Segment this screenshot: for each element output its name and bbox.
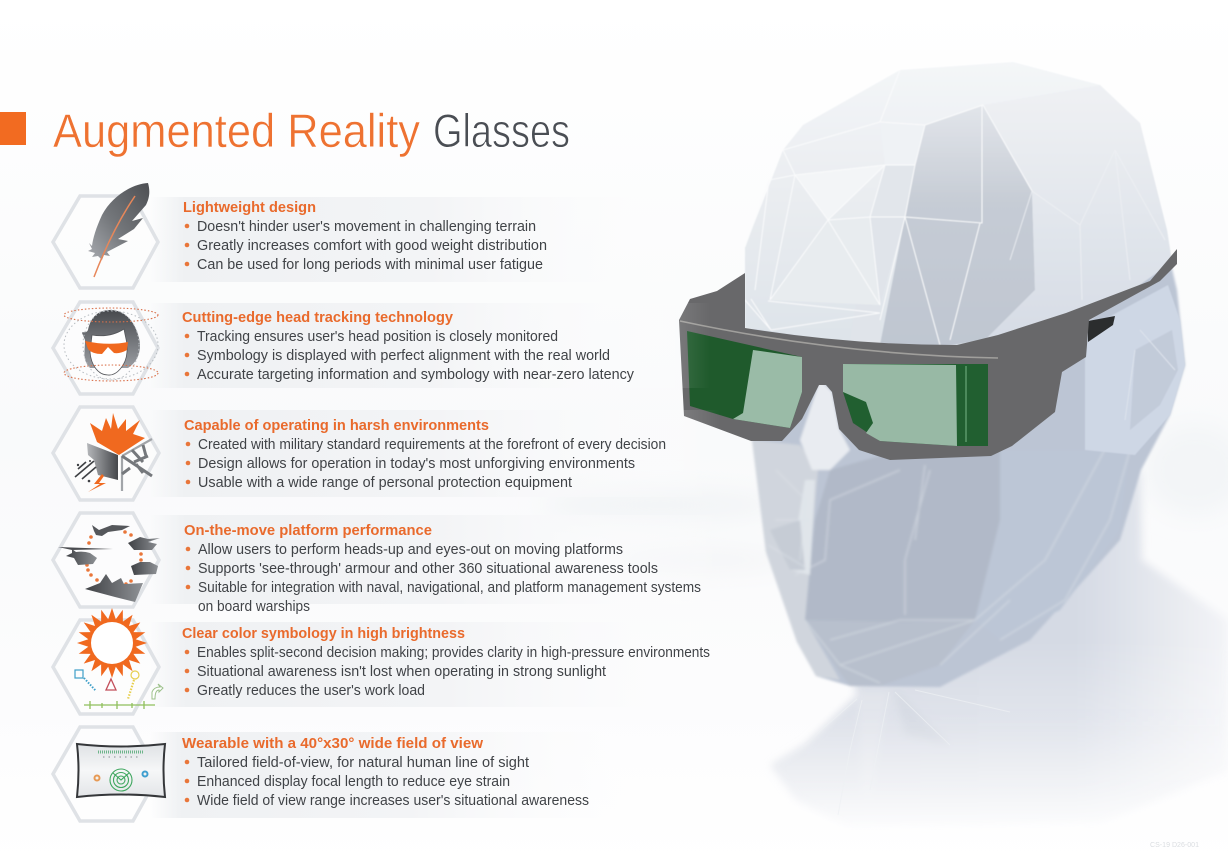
title: Augmented Reality: [53, 104, 420, 157]
heading: On-the-move platform performance: [184, 523, 432, 539]
icon: sunburst with coloured symbols: [53, 608, 163, 714]
bullet list: Greatly reduces the user's work load: [197, 683, 425, 699]
bullet list: Symbology is displayed with perfect alignment with the real world: [197, 348, 610, 364]
bullet list: Greatly increases comfort with good weight distribution: [197, 238, 547, 254]
illustration: faceted head wearing AR glasses: [679, 62, 1228, 830]
bullet list: on board warships: [198, 599, 310, 615]
heading: Clear color symbology in high brightness: [182, 626, 465, 642]
bullet list: Tailored field-of-view, for natural human line of sight: [197, 755, 529, 771]
icon: blast, cold and debris cube: [53, 407, 159, 500]
bullet list: Tracking ensures user's head position is closely monitored: [197, 329, 558, 345]
icon: vehicles around dotted circle: [53, 513, 160, 607]
title accent square: [0, 112, 26, 145]
bullet list: Enables split-second decision making; provides clarity in high-pressure environments: [197, 645, 710, 661]
bullet list: Doesn't hinder user's movement in challenging terrain: [197, 219, 536, 235]
neck creases: [805, 690, 1010, 815]
bullet list: Supports 'see-through' armour and other 360 situational awareness tools: [198, 561, 658, 577]
heading: Capable of operating in harsh environments: [184, 418, 489, 434]
panel: clear color symbology: [53, 608, 740, 714]
heading: Wearable with a 40°x30° wide field of view: [182, 736, 484, 752]
bullet list: Situational awareness isn't lost when operating in strong sunlight: [197, 664, 606, 680]
background haze: [540, 425, 1228, 572]
AR glasses: [679, 249, 1177, 460]
title: Glasses: [433, 104, 570, 157]
skull: [745, 62, 1172, 350]
panel: head tracking: [53, 302, 710, 394]
panel: on-the-move platform performance: [53, 513, 730, 615]
bullet list: [186, 542, 701, 615]
heading: Lightweight design: [183, 200, 316, 216]
panel: wide field of view: [53, 727, 670, 821]
bullet list: [186, 437, 666, 491]
heading: Cutting-edge head tracking technology: [182, 310, 453, 326]
panel: lightweight design: [53, 183, 710, 288]
bullet list: Allow users to perform heads-up and eyes-out on moving platforms: [198, 542, 623, 558]
neck and shoulders: [770, 470, 1228, 830]
glasses: rim highlight: [680, 321, 998, 358]
bullet list: Usable with a wide range of personal protection equipment: [198, 475, 572, 491]
ear: [1085, 285, 1185, 455]
bullet list: [185, 645, 710, 699]
document reference code: CS-19 D26-001: [1150, 842, 1199, 849]
bullet list: Wide field of view range increases user's situational awareness: [197, 793, 589, 809]
icon: head with tracking grid: [53, 302, 158, 394]
bullet list: Enhanced display focal length to reduce eye strain: [197, 774, 510, 790]
glasses: right lens: [843, 364, 988, 446]
bullet list: Accurate targeting information and symbology with near-zero latency: [197, 367, 635, 383]
icon: feather in hexagon: [53, 183, 158, 288]
panel: harsh environments: [53, 407, 720, 500]
bullet list: Created with military standard requirements at the forefront of every decision: [198, 437, 666, 453]
bullet list: [185, 219, 547, 273]
bullet list: Suitable for integration with naval, navigational, and platform management systems: [198, 580, 701, 596]
bullet list: [185, 329, 635, 383]
head base and lower face: [745, 260, 1185, 687]
bullet list: Design allows for operation in today's most unforgiving environments: [198, 456, 635, 472]
glasses: left lens: [687, 331, 802, 428]
icon: curved display with radar: [53, 727, 165, 821]
glasses: frame: [679, 249, 1177, 460]
bullet list: Can be used for long periods with minimal user fatigue: [197, 257, 543, 273]
bullet list: [185, 755, 589, 809]
glasses: side strap mount: [1088, 316, 1115, 342]
